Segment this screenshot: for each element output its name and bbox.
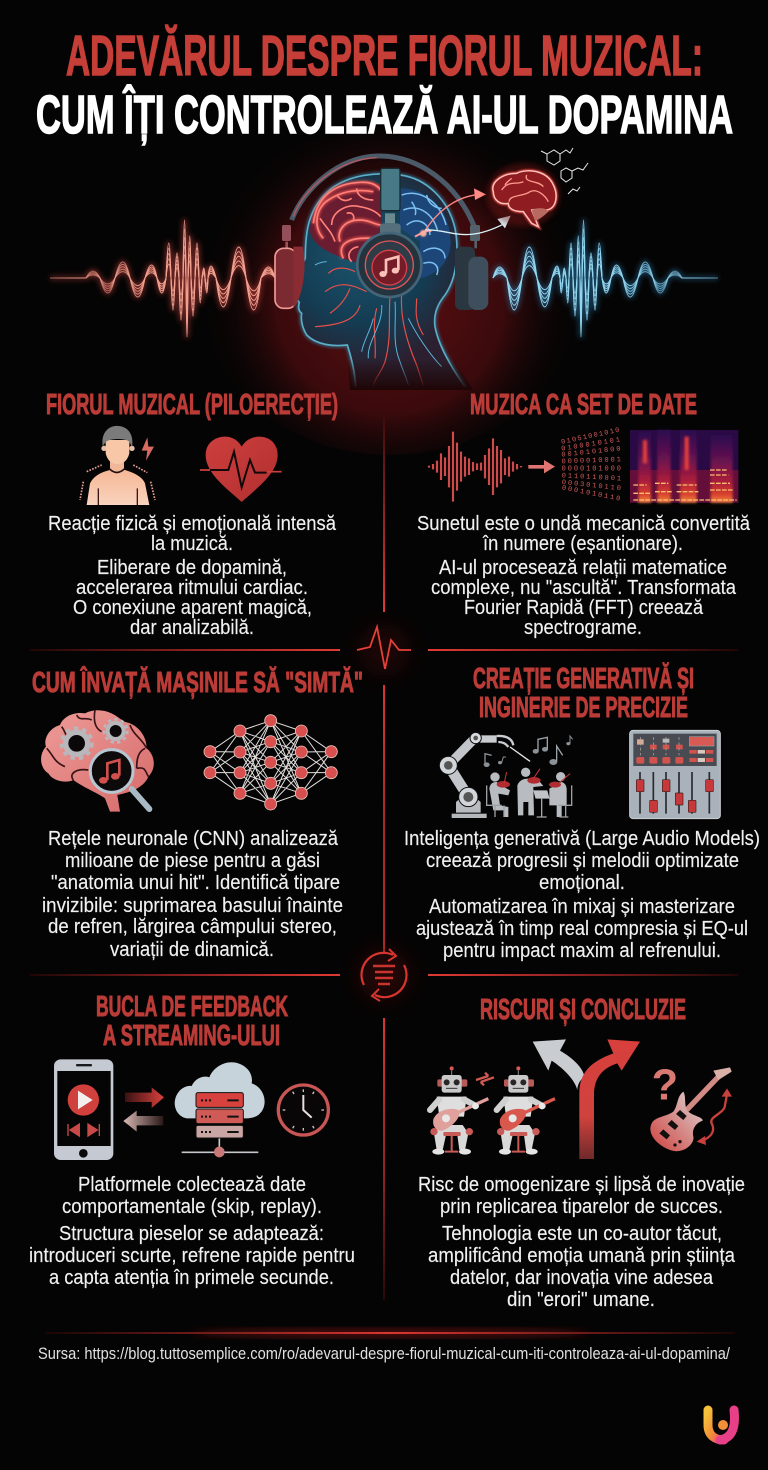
icon: binary digits: 0100010101 xyxy=(561,436,621,454)
text block: Fourier Rapidă (FFT) creează xyxy=(464,596,704,619)
center slider and ear cup xyxy=(357,168,421,297)
logo xyxy=(708,1410,734,1440)
text block: comportamentale (skip, replay). xyxy=(62,1195,322,1218)
panel: creatie generativa xyxy=(404,662,760,962)
icon: clock xyxy=(278,1085,328,1135)
icon: ECG divider badge xyxy=(357,624,411,676)
text block xyxy=(417,512,751,639)
text block: accelerarea ritmului cardiac. xyxy=(76,576,308,599)
icon: binary digits xyxy=(561,427,621,504)
text block: în numere (eșantionare). xyxy=(482,532,683,555)
text block xyxy=(42,827,343,961)
reward brain xyxy=(487,163,560,227)
icon: data arrows xyxy=(123,1087,164,1132)
text block: Reacție fizică și emoțională intensă xyxy=(48,512,337,535)
icon: guitar and question mark xyxy=(650,1061,732,1151)
text block: datelor, dar inovația vine adesea xyxy=(450,1266,714,1289)
icon: spectrogram xyxy=(630,430,738,503)
icon: waveform xyxy=(429,432,521,502)
heading: CUM ÎNVAȚĂ MAȘINILE SĂ "SIMTĂ" xyxy=(32,665,363,699)
icon: cycle divider badge xyxy=(358,949,410,1001)
text block xyxy=(404,827,760,962)
text block: emoțional. xyxy=(539,871,625,894)
brain: blue hemisphere xyxy=(400,188,451,278)
panel: cum invata masinile xyxy=(32,665,363,961)
dopamine molecules xyxy=(541,148,588,194)
background glow behind hero xyxy=(200,125,580,455)
dividers xyxy=(30,415,738,1337)
heading xyxy=(473,662,694,724)
text block: Eliberare de dopamină, xyxy=(97,556,287,579)
text block: din "erori" umane. xyxy=(507,1288,655,1311)
panel: fiorul muzical xyxy=(46,389,338,639)
text block: O conexiune aparent magică, xyxy=(73,596,312,619)
heading xyxy=(96,991,288,1052)
text block: variații de dinamică. xyxy=(110,938,274,961)
text block xyxy=(29,1173,355,1289)
icon: phone with player xyxy=(54,1059,113,1160)
icon: binary digits: 0001010110 xyxy=(561,484,621,504)
brain: red hemisphere xyxy=(310,181,382,263)
red sound wave xyxy=(50,220,275,337)
neck fade xyxy=(347,358,473,390)
icon: forked arrows xyxy=(533,1039,640,1159)
text block: Platformele colectează date xyxy=(78,1173,306,1196)
text block: spectrograme. xyxy=(524,616,642,639)
icon: cloud server xyxy=(175,1062,265,1157)
icon: binary digits: 0000101000 xyxy=(562,466,621,474)
text block: dar analizabilă. xyxy=(130,616,254,639)
text block: invizibile: suprimarea basului înainte xyxy=(42,894,343,917)
icon: heart with pulse xyxy=(200,437,282,502)
icon: arrow xyxy=(528,460,555,473)
panel: bucla de feedback xyxy=(29,991,355,1289)
text block: la muzică. xyxy=(151,532,233,555)
icon: two robot guitarists xyxy=(430,1066,555,1155)
icon: person with goosebumps xyxy=(80,426,155,505)
text block: a capta atenția în primele secunde. xyxy=(49,1266,334,1289)
text block xyxy=(48,512,337,639)
hero illustration xyxy=(50,148,718,390)
text block: "anatomia unui hit". Identifică tipare xyxy=(51,871,340,894)
text block: Rețele neuronale (CNN) analizează xyxy=(48,827,339,850)
text block: Tehnologia este un co-autor tăcut, xyxy=(442,1222,722,1245)
text block: milioane de piese pentru a găsi xyxy=(65,849,320,872)
heading: A STREAMING-ULUI xyxy=(103,1020,280,1052)
icon: binary digits: 0010101800 xyxy=(561,445,621,460)
right ear cup xyxy=(455,225,488,310)
left ear cup xyxy=(275,225,305,308)
icon: brain with gears and magnifier xyxy=(41,710,154,812)
text block: complexe, nu "ascultă". Transformata xyxy=(431,576,737,599)
text block: Automatizarea în mixaj și masterizare xyxy=(429,895,735,918)
text block: prin replicarea tiparelor de succes. xyxy=(440,1195,723,1218)
text block: AI-ul procesează relații matematice xyxy=(439,556,727,579)
text block: pentru impact maxim al refrenului. xyxy=(443,939,721,962)
icon: binary digits: 0110110801 xyxy=(562,472,621,483)
blue sound wave xyxy=(493,220,718,337)
head silhouette xyxy=(289,174,465,387)
head with headphones xyxy=(275,156,560,390)
panel: riscuri si concluzie xyxy=(418,994,745,1311)
icon: binary digits: 0003010110 xyxy=(561,479,621,493)
icon: guitar and question mark: ? xyxy=(652,1061,678,1109)
text block xyxy=(418,1173,745,1311)
nerve veins xyxy=(315,262,442,385)
text block: introduceri scurte, refrene rapide pentru xyxy=(29,1244,355,1267)
heading: FIORUL MUZICAL (PILOERECȚIE) xyxy=(46,389,338,421)
headband xyxy=(292,156,475,228)
icon: binary digits: 01051001010 xyxy=(561,427,620,447)
icon: binary digits: 0000010001 xyxy=(561,456,621,466)
text block: amplificând emoția umană prin știința xyxy=(428,1244,736,1267)
heading: BUCLA DE FEEDBACK xyxy=(96,991,288,1023)
icon: mixing console xyxy=(630,730,720,819)
icon: robot arm conducting musicians xyxy=(439,732,573,818)
text block: Structura pieselor se adaptează: xyxy=(59,1222,324,1245)
panel: muzica ca set de date xyxy=(417,389,751,639)
text block: creează progresii și melodii optimizate xyxy=(426,849,739,872)
text block: de refren, lărgirea câmpului stereo, xyxy=(48,915,337,938)
title xyxy=(36,24,733,145)
icon: neural network xyxy=(204,715,337,810)
arrows to brain xyxy=(420,188,511,237)
